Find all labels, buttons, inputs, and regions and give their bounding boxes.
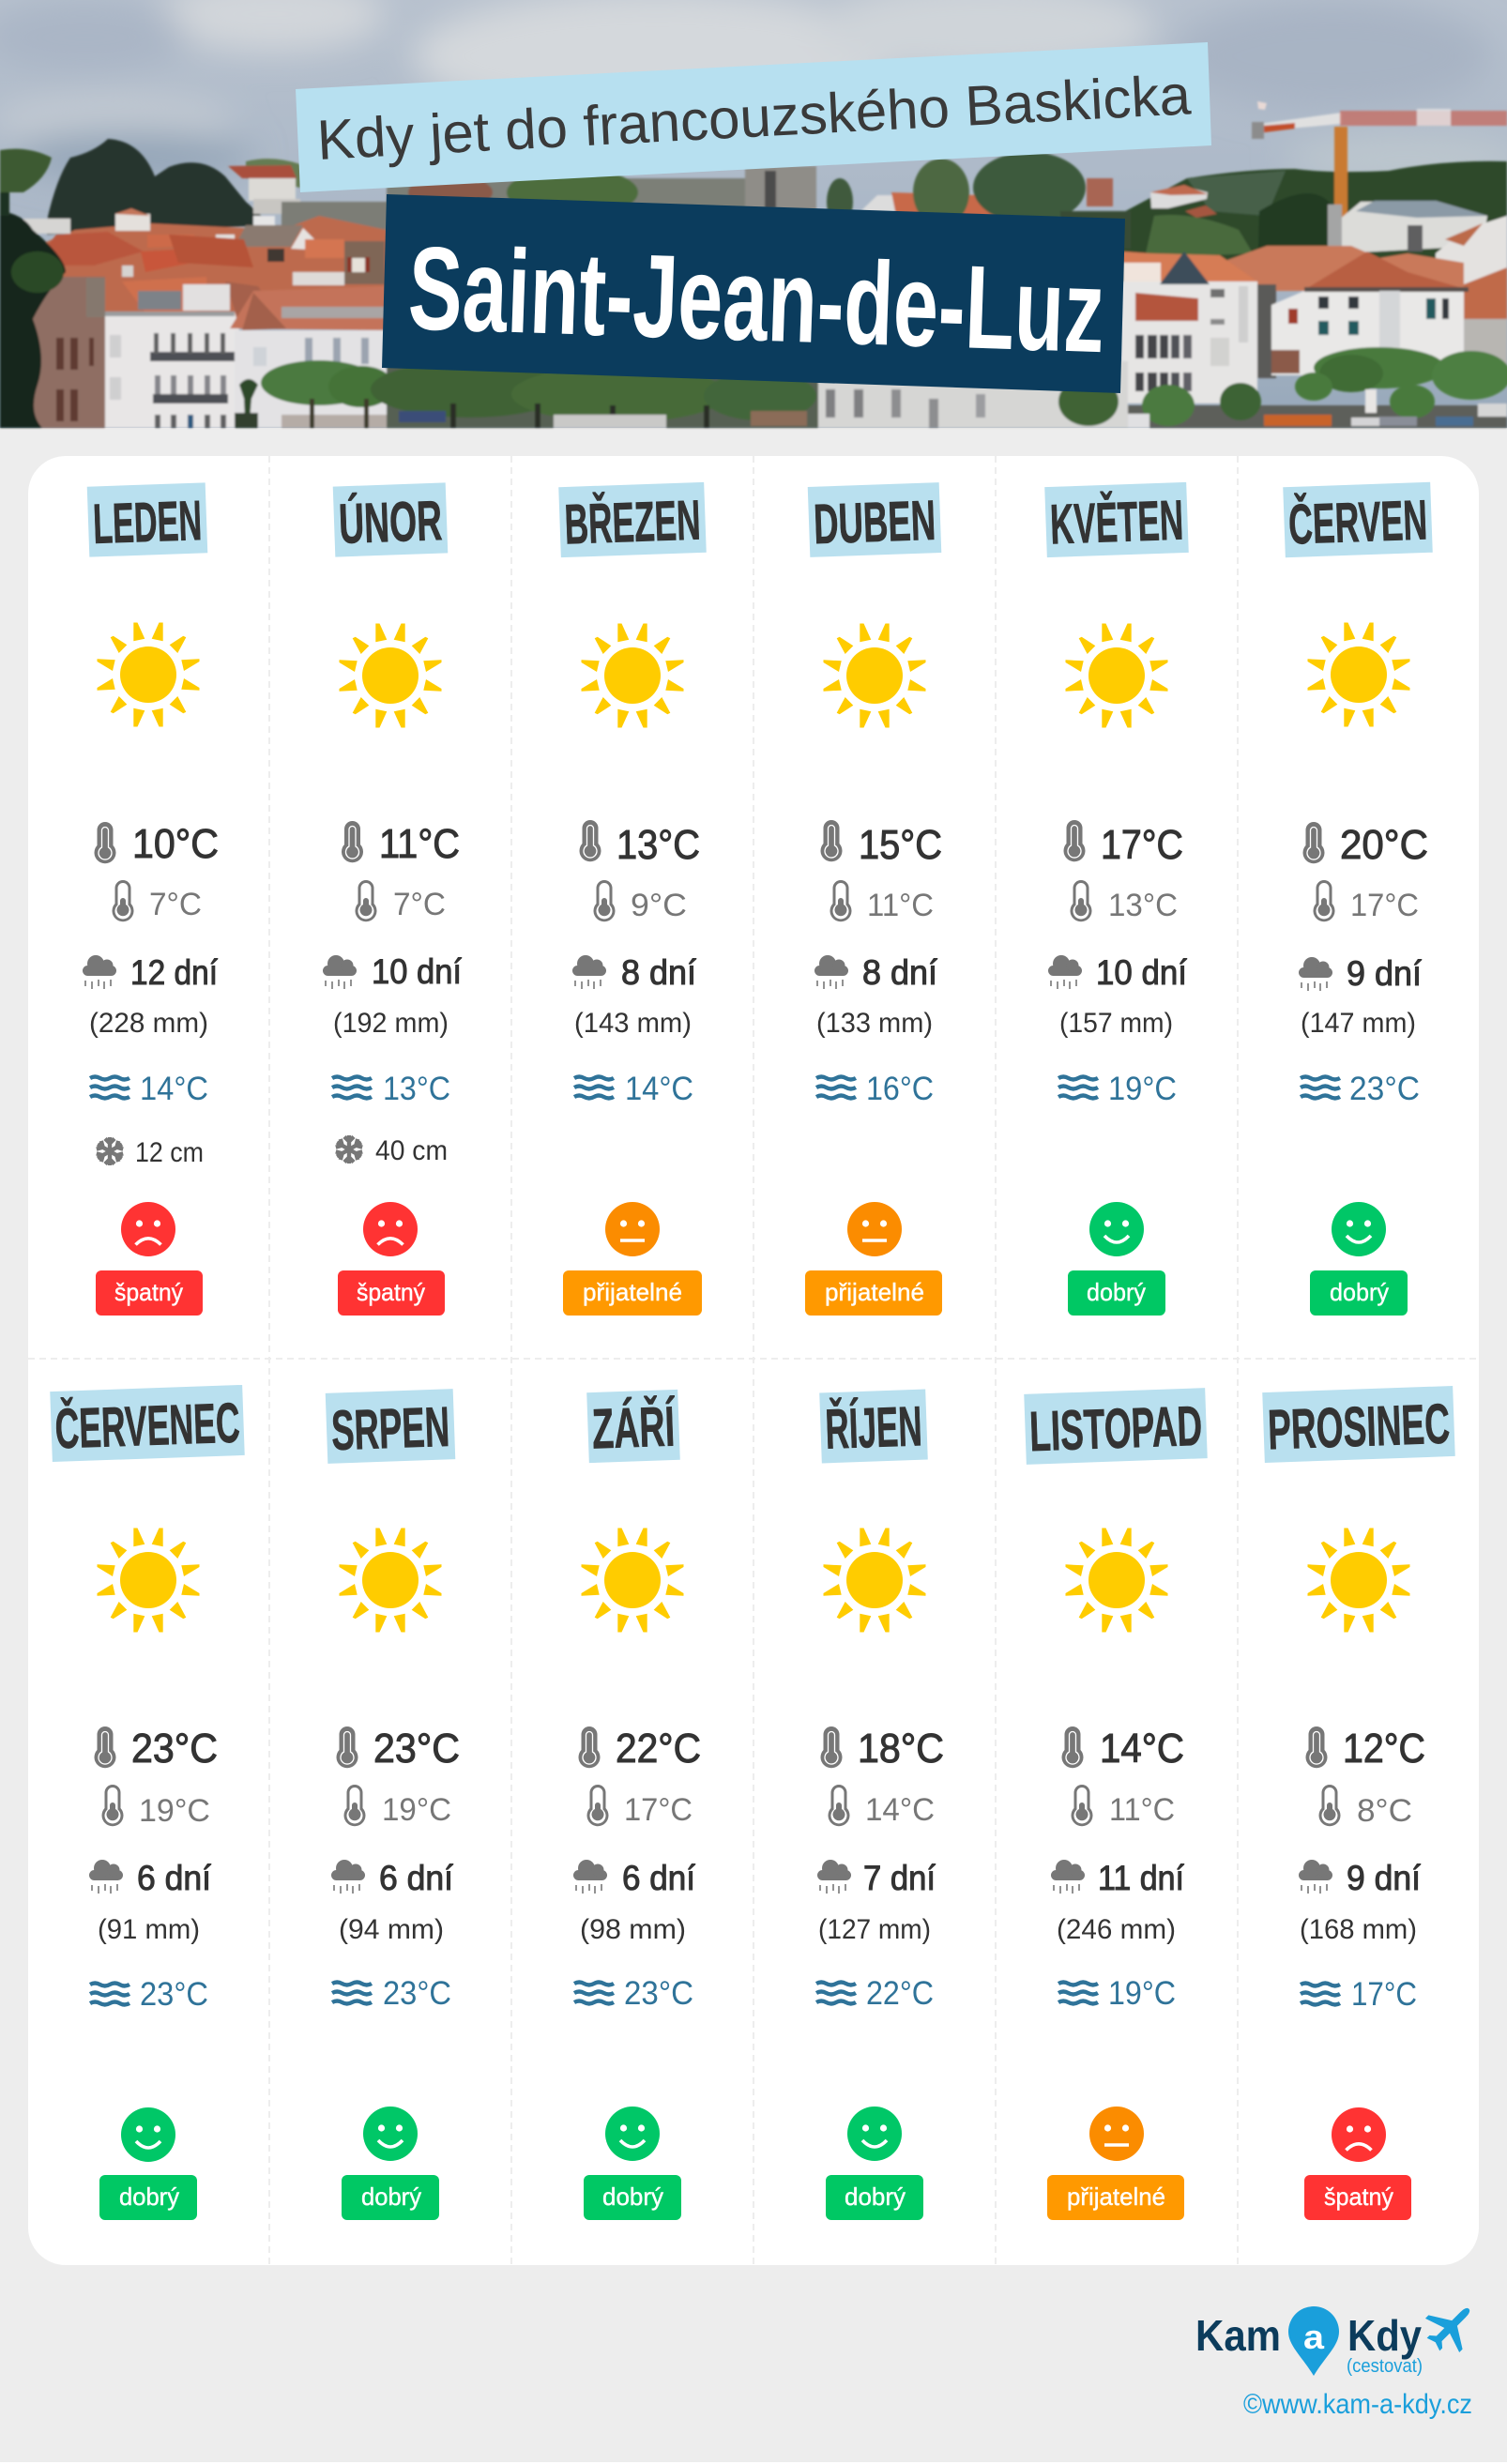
rating tag bbox=[1068, 1270, 1165, 1316]
icon: sun bbox=[340, 623, 441, 728]
low temperature: 11°C bbox=[867, 888, 934, 923]
high temperature bbox=[1306, 1726, 1425, 1772]
high temperature: 13°C bbox=[616, 822, 700, 868]
icon: happy face bbox=[847, 2107, 902, 2161]
heading: březen: BŘEZEN bbox=[563, 488, 702, 556]
icon: happy face bbox=[1089, 1202, 1144, 1256]
logo: Kam a Kdy bbox=[1195, 2292, 1485, 2377]
sea temperature: 23°C bbox=[383, 1975, 451, 2012]
icon: sun bbox=[340, 1528, 441, 1633]
rating tag bbox=[584, 2175, 681, 2220]
month: červenec bbox=[50, 1385, 245, 2220]
icon: neutral face bbox=[847, 1202, 902, 1256]
rating tag: dobrý bbox=[119, 2183, 179, 2211]
logo: Kam a Kdy: (cestovat) bbox=[1347, 2356, 1423, 2377]
low temperature: 17°C bbox=[624, 1792, 693, 1828]
rainy days bbox=[323, 952, 463, 991]
rating tag bbox=[338, 1270, 445, 1316]
heading: září bbox=[586, 1390, 680, 1463]
heading: leden bbox=[87, 482, 207, 557]
rainy days bbox=[573, 1859, 696, 1897]
rainy days: 6 dní bbox=[379, 1859, 454, 1897]
month: květen bbox=[1044, 482, 1189, 1316]
sea temperature bbox=[1301, 1071, 1420, 1107]
rainy days: 8 dní bbox=[621, 953, 697, 992]
icon: sun bbox=[1066, 623, 1167, 728]
low temperature: 11°C bbox=[1109, 1792, 1175, 1828]
icon: sun bbox=[582, 623, 683, 728]
low temperature: 7°C bbox=[149, 887, 202, 922]
precipitation: (157 mm) bbox=[1059, 1008, 1173, 1039]
high temperature: 10°C bbox=[132, 821, 219, 867]
rainy days bbox=[1051, 1859, 1185, 1897]
low temperature bbox=[587, 1785, 693, 1828]
low temperature bbox=[1070, 880, 1178, 923]
heading: červen bbox=[1283, 482, 1433, 557]
rating tag bbox=[563, 1270, 702, 1316]
low temperature: 19°C bbox=[382, 1792, 451, 1828]
subtitle banner bbox=[296, 42, 1211, 192]
low temperature: 14°C bbox=[865, 1792, 935, 1828]
icon: map pin bbox=[1288, 2306, 1339, 2376]
precipitation: (228 mm) bbox=[89, 1008, 208, 1039]
heading: srpen: SRPEN bbox=[330, 1395, 450, 1462]
low temperature bbox=[355, 880, 446, 922]
month: leden bbox=[83, 482, 219, 1316]
snow bbox=[335, 1135, 448, 1166]
rating tag bbox=[1047, 2175, 1184, 2220]
heading: březen bbox=[558, 482, 707, 557]
rainy days: 10 dní bbox=[372, 952, 463, 991]
subtitle banner: Kdy jet do francouzského Baskicka bbox=[315, 63, 1193, 172]
high temperature: 23°C bbox=[131, 1726, 218, 1772]
month: listopad bbox=[1024, 1388, 1208, 2220]
icon: neutral face bbox=[605, 1202, 660, 1256]
month: červen bbox=[1283, 482, 1433, 1316]
rainy days: 12 dní bbox=[130, 953, 219, 992]
logo: Kam a Kdy: Kdy bbox=[1347, 2311, 1422, 2360]
icon: happy face bbox=[605, 2107, 660, 2161]
rainy days: 9 dní bbox=[1347, 954, 1423, 993]
high temperature: 22°C bbox=[616, 1726, 701, 1772]
precipitation: (192 mm) bbox=[333, 1008, 449, 1039]
sea temperature bbox=[1301, 1976, 1417, 2013]
low temperature: 9°C bbox=[631, 888, 687, 923]
icon: map pin: a bbox=[1303, 2318, 1325, 2356]
icon: sad face bbox=[1332, 2107, 1386, 2162]
sea temperature: 22°C bbox=[866, 1975, 934, 2012]
rainy days: 11 dní bbox=[1098, 1859, 1185, 1897]
heading: duben: DUBEN bbox=[813, 489, 936, 555]
sea temperature bbox=[90, 1976, 208, 2013]
low temperature: 8°C bbox=[1357, 1793, 1412, 1829]
precipitation: (98 mm) bbox=[580, 1914, 686, 1945]
sea temperature: 23°C bbox=[140, 1976, 208, 2013]
month: duben bbox=[805, 482, 942, 1316]
heading: srpen bbox=[326, 1389, 455, 1464]
logo: Kam a Kdy: Kam bbox=[1195, 2311, 1281, 2360]
heading: červenec bbox=[50, 1385, 245, 1462]
low temperature bbox=[593, 880, 687, 923]
sea temperature: 13°C bbox=[383, 1071, 450, 1107]
rainy days: 6 dní bbox=[137, 1859, 212, 1897]
sea temperature: 19°C bbox=[1108, 1071, 1177, 1107]
sea temperature: 23°C bbox=[1349, 1071, 1420, 1107]
month: prosinec bbox=[1262, 1386, 1455, 2220]
sea temperature: 17°C bbox=[1351, 1976, 1417, 2013]
title banner bbox=[382, 194, 1125, 393]
sea temperature: 19°C bbox=[1108, 1975, 1176, 2012]
low temperature bbox=[101, 1785, 210, 1829]
rainy days bbox=[572, 953, 697, 992]
rainy days: 6 dní bbox=[622, 1859, 696, 1897]
rainy days: 8 dní bbox=[862, 953, 938, 992]
low temperature bbox=[343, 1785, 451, 1828]
rainy days bbox=[331, 1859, 454, 1897]
panel: monthly climate card bbox=[28, 456, 1479, 2265]
icon: sun bbox=[98, 623, 199, 726]
rating tag: dobrý bbox=[602, 2183, 663, 2211]
low temperature bbox=[1319, 1785, 1412, 1829]
rainy days bbox=[1048, 953, 1188, 992]
precipitation: (133 mm) bbox=[816, 1008, 933, 1039]
rating tag: přijatelné bbox=[825, 1278, 924, 1306]
icon: sun bbox=[1308, 623, 1409, 726]
high temperature bbox=[94, 1726, 218, 1772]
high temperature bbox=[820, 1726, 944, 1772]
heading: duben bbox=[808, 482, 941, 557]
icon: sad face bbox=[363, 1202, 418, 1256]
rainy days bbox=[1299, 954, 1423, 993]
low temperature: 19°C bbox=[139, 1793, 210, 1829]
rating tag bbox=[1310, 1270, 1408, 1316]
icon: sun bbox=[1066, 1528, 1167, 1633]
rainy days bbox=[814, 953, 938, 992]
high temperature bbox=[94, 821, 219, 867]
sea temperature bbox=[1058, 1071, 1177, 1107]
rating tag: špatný bbox=[357, 1278, 425, 1306]
low temperature bbox=[1072, 1785, 1175, 1828]
month: říjen bbox=[816, 1390, 944, 2220]
sea temperature bbox=[574, 1975, 693, 2012]
icon: sun bbox=[824, 623, 925, 728]
rating tag bbox=[99, 2175, 197, 2220]
month: březen bbox=[558, 482, 707, 1316]
high temperature bbox=[1062, 1726, 1184, 1772]
heading: únor bbox=[333, 482, 448, 557]
rating tag: dobrý bbox=[1330, 1278, 1389, 1306]
rating tag bbox=[805, 1270, 942, 1316]
high temperature bbox=[342, 821, 460, 867]
rating tag: špatný bbox=[114, 1278, 183, 1306]
rating tag: dobrý bbox=[1087, 1278, 1146, 1306]
low temperature: 13°C bbox=[1108, 888, 1178, 923]
high temperature: 23°C bbox=[373, 1726, 460, 1772]
precipitation: (147 mm) bbox=[1301, 1008, 1416, 1039]
heading: červenec: ČERVENEC bbox=[53, 1392, 241, 1460]
high temperature bbox=[1302, 822, 1428, 868]
heading: květen: KVĚTEN bbox=[1049, 489, 1184, 555]
month: únor bbox=[323, 482, 463, 1316]
icon: sun bbox=[98, 1528, 199, 1633]
high temperature: 14°C bbox=[1100, 1726, 1184, 1772]
sea temperature: 14°C bbox=[625, 1071, 693, 1107]
sea temperature: 16°C bbox=[866, 1071, 934, 1107]
rating tag bbox=[826, 2175, 923, 2220]
precipitation: (91 mm) bbox=[98, 1914, 200, 1945]
sea temperature bbox=[574, 1071, 693, 1107]
heading: září: ZÁŘÍ bbox=[591, 1394, 677, 1461]
icon: sun bbox=[582, 1528, 683, 1633]
title banner: Saint-Jean-de-Luz bbox=[406, 221, 1106, 377]
sea temperature bbox=[816, 1975, 934, 2012]
high temperature bbox=[580, 820, 700, 868]
sea temperature bbox=[90, 1071, 208, 1107]
heading: listopad bbox=[1024, 1388, 1208, 1465]
low temperature bbox=[1314, 880, 1419, 923]
snow bbox=[96, 1137, 204, 1168]
sea temperature bbox=[1058, 1975, 1176, 2012]
rainy days: 7 dní bbox=[863, 1859, 936, 1897]
heading: leden: LEDEN bbox=[92, 489, 203, 555]
low temperature bbox=[828, 1785, 935, 1828]
icon: sun bbox=[824, 1528, 925, 1633]
high temperature: 11°C bbox=[379, 821, 460, 867]
icon: neutral face bbox=[1089, 2107, 1144, 2161]
sea temperature bbox=[332, 1071, 450, 1107]
rating tag: přijatelné bbox=[583, 1278, 682, 1306]
precipitation: (143 mm) bbox=[574, 1008, 692, 1039]
rainy days bbox=[83, 953, 219, 992]
rating tag: špatný bbox=[1324, 2183, 1393, 2211]
precipitation: (246 mm) bbox=[1057, 1914, 1176, 1945]
rating tag bbox=[1304, 2175, 1411, 2220]
heading: říjen: ŘÍJEN bbox=[824, 1394, 923, 1461]
low temperature: 17°C bbox=[1350, 888, 1419, 923]
high temperature bbox=[336, 1726, 460, 1772]
sea temperature bbox=[816, 1071, 934, 1107]
icon: sad face bbox=[121, 1202, 175, 1256]
rainy days bbox=[1299, 1859, 1422, 1897]
snow: 12 cm bbox=[135, 1137, 204, 1168]
high temperature: 18°C bbox=[858, 1726, 944, 1772]
icon: airplane bbox=[1416, 2292, 1485, 2362]
precipitation: (94 mm) bbox=[339, 1914, 444, 1945]
snow: 40 cm bbox=[375, 1135, 448, 1166]
heading: říjen bbox=[819, 1390, 928, 1463]
high temperature: 17°C bbox=[1101, 822, 1183, 868]
low temperature bbox=[830, 880, 934, 923]
month: září bbox=[573, 1390, 701, 2220]
rainy days bbox=[817, 1859, 936, 1897]
icon: happy face bbox=[121, 2107, 175, 2162]
high temperature: 15°C bbox=[859, 822, 942, 868]
heading: květen bbox=[1044, 482, 1189, 557]
high temperature bbox=[578, 1726, 701, 1772]
rating tag: dobrý bbox=[361, 2183, 421, 2211]
month: srpen bbox=[326, 1389, 460, 2220]
rating tag bbox=[342, 2175, 439, 2220]
sea temperature: 23°C bbox=[624, 1975, 693, 2012]
high temperature bbox=[1064, 820, 1183, 868]
rating tag: přijatelné bbox=[1067, 2183, 1165, 2211]
header photo: town of Saint-Jean-de-Luz bbox=[0, 0, 1507, 428]
high temperature bbox=[820, 820, 942, 868]
rainy days: 10 dní bbox=[1096, 953, 1188, 992]
high temperature: 12°C bbox=[1343, 1726, 1425, 1772]
heading: listopad: LISTOPAD bbox=[1028, 1394, 1203, 1463]
icon: happy face bbox=[363, 2107, 418, 2161]
rainy days: 9 dní bbox=[1347, 1859, 1422, 1897]
icon: happy face bbox=[1332, 1202, 1386, 1256]
precipitation: (168 mm) bbox=[1300, 1914, 1417, 1945]
rating tag: dobrý bbox=[845, 2183, 906, 2211]
icon: sun bbox=[1308, 1528, 1409, 1633]
low temperature: 7°C bbox=[393, 887, 446, 922]
website credit: ©www.kam-a-kdy.cz bbox=[1243, 2389, 1472, 2420]
high temperature: 20°C bbox=[1340, 822, 1428, 868]
heading: únor: ÚNOR bbox=[338, 489, 443, 555]
precipitation: (127 mm) bbox=[818, 1914, 931, 1945]
rainy days bbox=[89, 1859, 212, 1897]
rating tag bbox=[96, 1270, 203, 1316]
sea temperature: 14°C bbox=[140, 1071, 208, 1107]
low temperature bbox=[113, 880, 202, 922]
sea temperature bbox=[332, 1975, 451, 2012]
